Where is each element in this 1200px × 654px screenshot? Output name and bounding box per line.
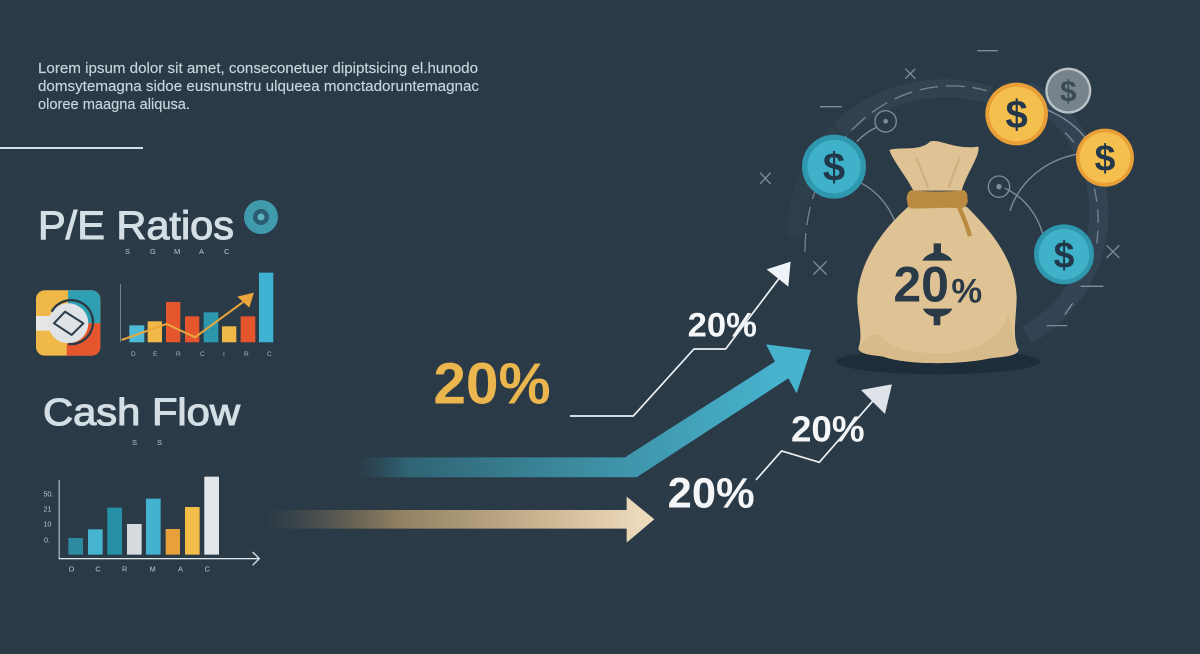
P/E chart axis labels: R bbox=[176, 351, 181, 358]
x axis labels: C bbox=[205, 565, 211, 574]
orbit band bbox=[797, 130, 840, 237]
x axis labels: O bbox=[69, 565, 75, 574]
heading: Cash Flow: Cash Flow bbox=[43, 392, 241, 434]
P/E chart axis labels: I bbox=[223, 351, 225, 358]
bag tie bbox=[907, 190, 968, 209]
trend arrow bbox=[122, 293, 254, 340]
P/E chart axis labels: D bbox=[131, 351, 136, 358]
orbit dashes bbox=[805, 86, 987, 252]
P/E sublabel: M bbox=[174, 247, 180, 256]
coin: gray bbox=[1045, 68, 1091, 114]
Cash Flow sublabel: S bbox=[132, 438, 137, 447]
P/E chart axis labels: R bbox=[244, 351, 249, 358]
value: upper 20%: 20% bbox=[688, 307, 757, 345]
arrow: lower white line bbox=[756, 384, 892, 480]
x axis labels: R bbox=[122, 565, 127, 574]
Cash Flow sublabel: S bbox=[157, 438, 162, 447]
coin: yellow right bbox=[1076, 129, 1134, 187]
bag neck bbox=[889, 141, 979, 191]
P/E sublabel: G bbox=[150, 247, 156, 256]
P/E chart axis labels: C bbox=[200, 351, 205, 358]
decoration: marks bbox=[760, 51, 1119, 326]
coin: yellow right: $ bbox=[1095, 137, 1116, 179]
value: lower 20%: 20% bbox=[791, 409, 865, 450]
P/E sublabel bbox=[125, 247, 230, 256]
intro text block: oloree maagna aliqusa. bbox=[38, 97, 190, 113]
Cash Flow sublabel bbox=[132, 438, 162, 447]
arrows bbox=[265, 262, 892, 543]
y axis labels: 10 bbox=[43, 520, 51, 529]
coin: yellow top bbox=[985, 83, 1048, 145]
bag label: % bbox=[951, 272, 982, 310]
coin: gray: $ bbox=[1060, 75, 1076, 108]
intro text block bbox=[38, 61, 479, 113]
bar chart: Cash Flow bbox=[43, 477, 259, 574]
y axis labels: 50. bbox=[43, 490, 54, 499]
bag body bbox=[857, 207, 1019, 363]
coin: teal right bbox=[1034, 224, 1094, 284]
value: gold 20%: 20% bbox=[433, 351, 551, 416]
coin: teal left bbox=[802, 135, 866, 199]
coin: teal right: $ bbox=[1054, 234, 1075, 276]
bar chart: P/E bbox=[120, 273, 273, 342]
P/E sublabel: C bbox=[224, 247, 230, 256]
bag label bbox=[893, 243, 982, 325]
P/E sublabel: A bbox=[199, 247, 204, 256]
value: bottom 20%: 20% bbox=[668, 470, 755, 518]
y axis labels: 21 bbox=[43, 504, 51, 513]
P/E sublabel: S bbox=[125, 247, 130, 256]
P/E chart axis labels bbox=[131, 351, 272, 358]
bag label: 20 bbox=[893, 257, 949, 313]
y axis labels: 0. bbox=[44, 536, 50, 545]
y axis labels bbox=[43, 490, 54, 545]
P/E chart axis labels: E bbox=[153, 351, 158, 358]
icon: handshake tile bbox=[36, 290, 100, 356]
money bag illustration bbox=[760, 51, 1134, 374]
x axis labels: A bbox=[178, 565, 183, 574]
arrow: upper white line bbox=[570, 262, 791, 416]
heading: P/E Ratios: P/E Ratios bbox=[38, 204, 234, 248]
arrow: teal main bbox=[355, 344, 811, 477]
intro text block: domsytemagna sidoe eusnunstru ulqueea monctadoruntemagnac bbox=[38, 79, 479, 95]
intro text block: Lorem ipsum dolor sit amet, conseconetuer dipiptsicing el.hunodo bbox=[38, 61, 478, 77]
x axis labels: M bbox=[150, 565, 156, 574]
P/E chart axis labels: C bbox=[267, 351, 272, 358]
bag shadow bbox=[836, 349, 1040, 374]
icon: teal gear badge bbox=[244, 200, 278, 234]
coin: yellow top: $ bbox=[1006, 93, 1028, 137]
arrow: beige bbox=[265, 497, 654, 543]
x axis labels: C bbox=[95, 565, 101, 574]
divider line bbox=[0, 147, 143, 149]
coin: teal left: $ bbox=[823, 146, 845, 190]
x axis labels bbox=[69, 565, 211, 574]
